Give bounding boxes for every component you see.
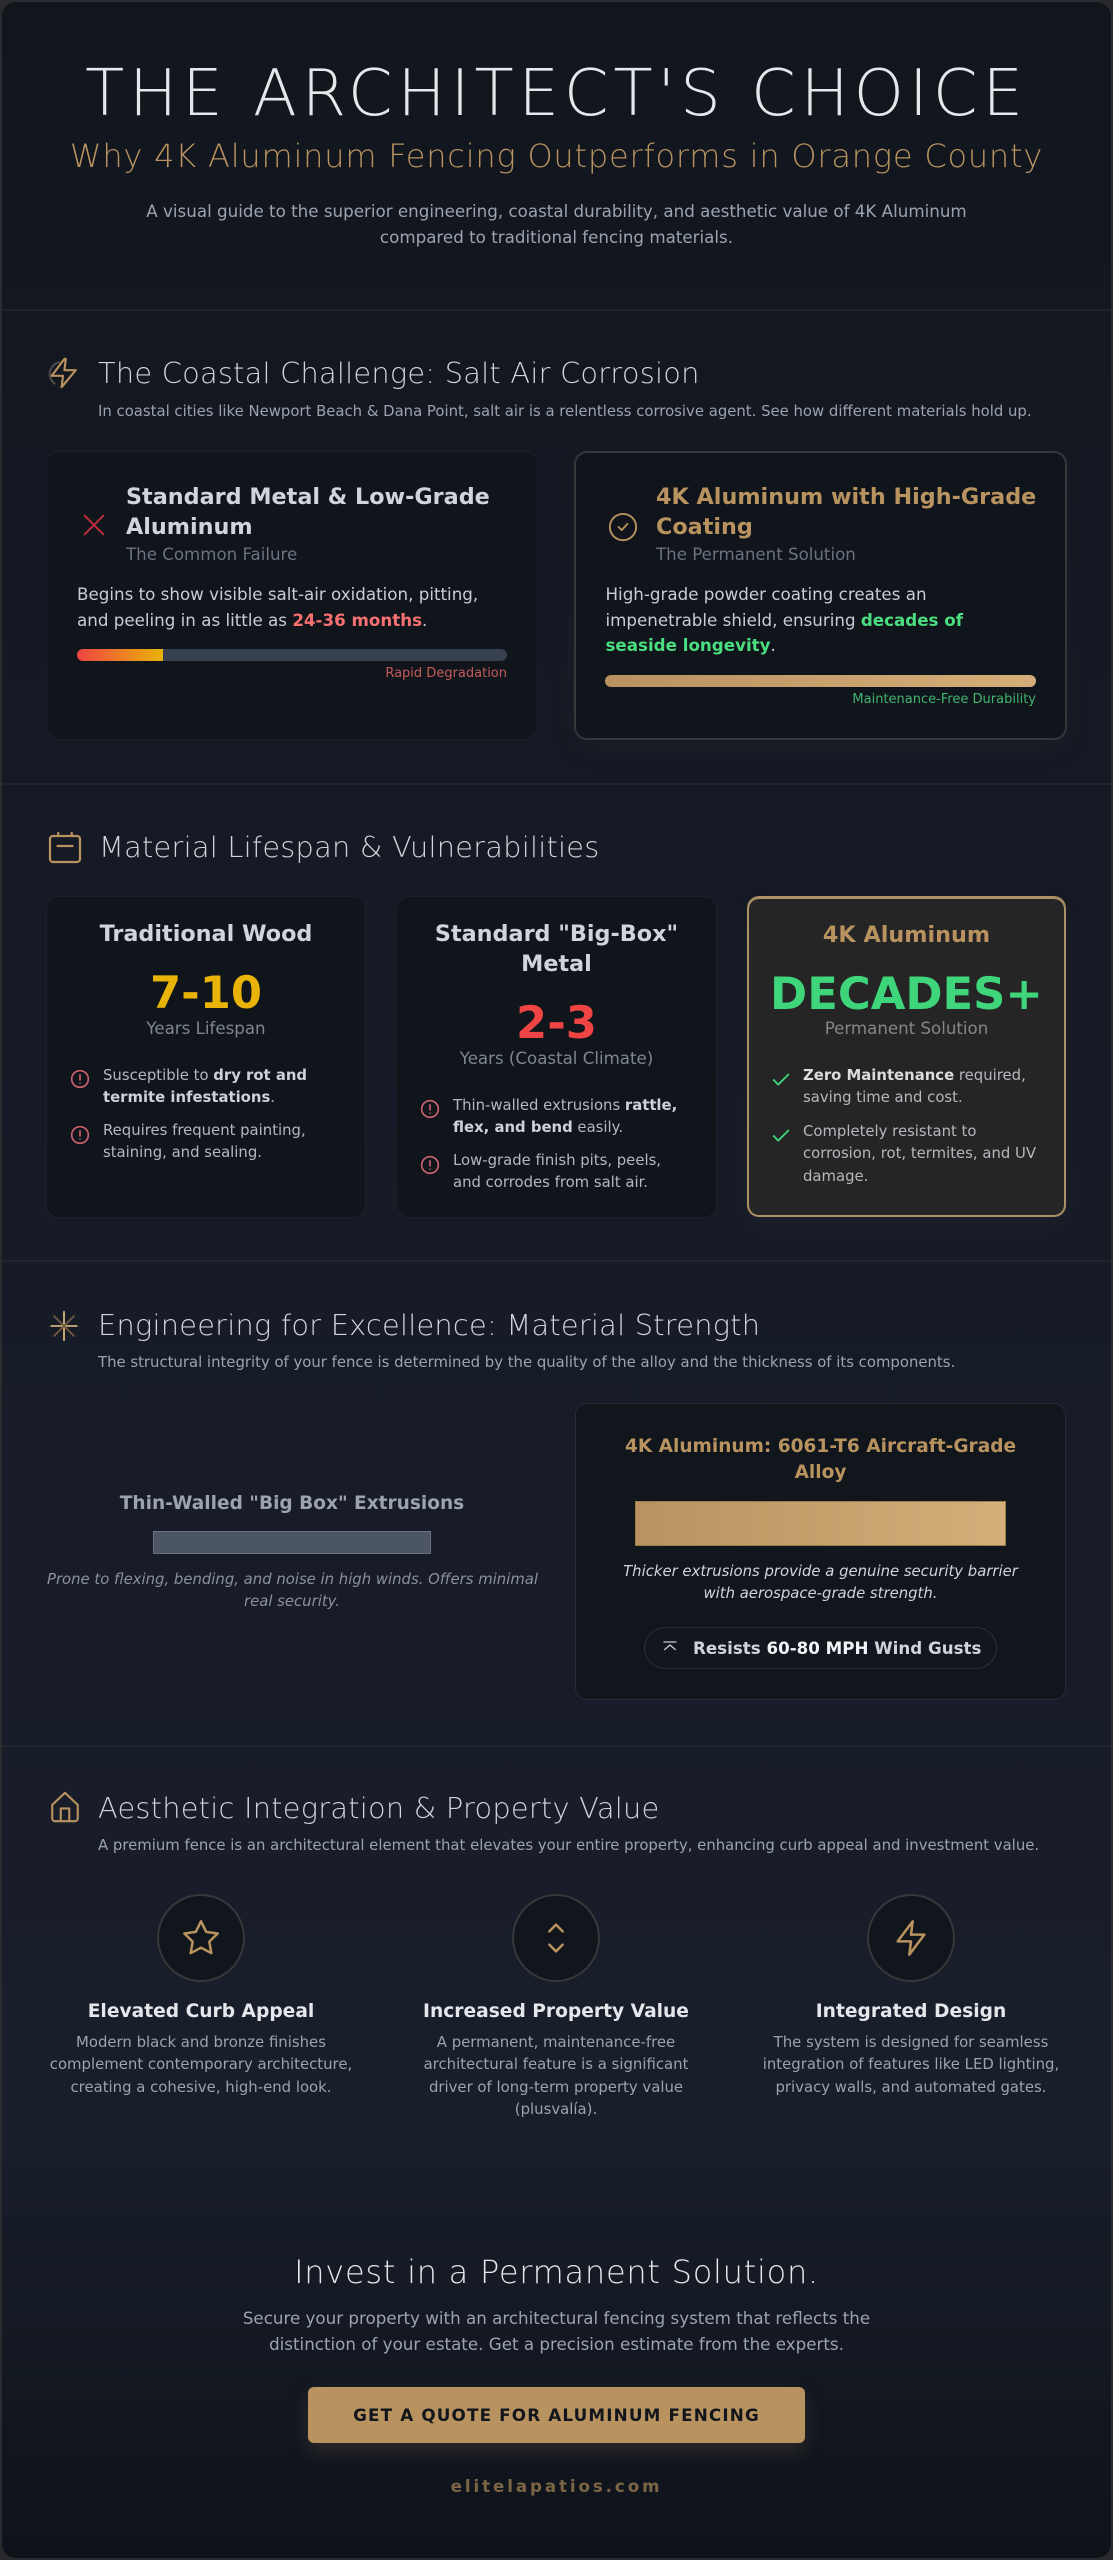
- description: compared to traditional fencing materials.: [380, 227, 733, 247]
- lifespan value: DECADES+: [770, 967, 1043, 1020]
- list item: [803, 1122, 1036, 1185]
- body text: [606, 584, 964, 655]
- list item: flex, and bend easily.: [453, 1118, 623, 1136]
- section heading: The Coastal Challenge: Salt Air Corrosion: [98, 356, 700, 390]
- list: benefits: [772, 1066, 1036, 1185]
- section intro: The structural integrity of your fence is determined by the quality of the alloy and the thickness of its components.: [98, 1353, 955, 1371]
- card title: Aluminum: [126, 514, 253, 540]
- body text: and peeling in as little as 24-36 months.: [77, 610, 427, 630]
- feature text: [756, 2031, 1066, 2098]
- list item: [103, 1066, 307, 1106]
- card title: 4K Aluminum with High-Grade: [656, 484, 1036, 510]
- panel: thin-walled: [47, 1493, 538, 1610]
- footer website: elitelapatios.com: [451, 2476, 662, 2496]
- lifespan label: Years (Coastal Climate): [460, 1049, 653, 1068]
- body text: High-grade powder coating creates an: [606, 584, 927, 604]
- feature text: [50, 2033, 352, 2096]
- list item: and corrodes from salt air.: [453, 1173, 648, 1191]
- body text: [77, 584, 478, 630]
- caption: [47, 1570, 538, 1610]
- feature text: creating a cohesive, high-end look.: [70, 2078, 332, 2096]
- card title: [435, 921, 678, 977]
- list item: Completely resistant to: [803, 1122, 976, 1140]
- subtitle: Why 4K Aluminum Fencing Outperforms in Orange County: [70, 137, 1043, 175]
- feature text: The system is designed for seamless: [774, 2033, 1048, 2051]
- title: THE ARCHITECT'S CHOICE: [85, 57, 1028, 131]
- card title: Standard "Big-Box": [435, 921, 678, 947]
- icon: star: [157, 1894, 245, 1982]
- card title: Metal: [521, 951, 592, 977]
- section: material lifespan: [47, 830, 1066, 1217]
- icon: lightning bolt: [48, 358, 77, 388]
- section heading: Aesthetic Integration & Property Value: [98, 1791, 659, 1825]
- body text: Begins to show visible salt-air oxidation, pitting,: [77, 584, 478, 604]
- section: aesthetic integration: [50, 1791, 1059, 2118]
- progress bar: [77, 649, 507, 661]
- feature text: driver of long-term property value: [429, 2078, 683, 2096]
- panel title: Thin-Walled "Big Box" Extrusions: [120, 1493, 464, 1514]
- caption: Prone to flexing, bending, and noise in high winds. Offers minimal: [47, 1570, 538, 1588]
- caption: with aerospace-grade strength.: [704, 1584, 938, 1602]
- list item: saving time and cost.: [803, 1088, 963, 1106]
- feature text: [401, 2031, 711, 2121]
- lifespan label: Permanent Solution: [825, 1019, 988, 1038]
- list item: [452, 1096, 677, 1136]
- panel: 4k aluminum: [575, 452, 1066, 739]
- icon: x mark: [84, 514, 104, 536]
- badge text: Resists 60-80 MPH Wind Gusts: [693, 1638, 981, 1658]
- progress bar: [605, 675, 1036, 687]
- card title: Traditional Wood: [100, 921, 312, 947]
- list item: Thin-walled extrusions rattle,: [453, 1096, 677, 1114]
- panel title: 4K Aluminum: 6061-T6 Aircraft-Grade: [625, 1436, 1016, 1457]
- feature: curb appeal: [50, 1894, 352, 2096]
- feature text: architectural feature is a significant: [424, 2055, 688, 2073]
- cta text: Secure your property with an architectural fencing system that reflects the: [243, 2308, 870, 2328]
- description: A visual guide to the superior engineering, coastal durability, and aesthetic value of 4K Aluminum: [146, 201, 967, 221]
- button: [308, 2387, 805, 2443]
- list item: damage.: [803, 1167, 868, 1185]
- bar: thick extrusion: [635, 1501, 1006, 1546]
- feature text: complement contemporary architecture,: [50, 2055, 352, 2073]
- list item: termite infestations.: [103, 1088, 275, 1106]
- icon: alert: [70, 1126, 90, 1144]
- lifespan label: Years Lifespan: [146, 1019, 266, 1038]
- card title: [126, 484, 490, 540]
- list item: staining, and sealing.: [103, 1143, 262, 1161]
- body text: impenetrable shield, ensuring decades of: [606, 610, 963, 630]
- icon: alert: [420, 1100, 440, 1118]
- list item: [103, 1121, 306, 1161]
- lifespan value: 7-10: [150, 966, 262, 1019]
- icon: up-down chevrons: [512, 1894, 600, 1982]
- icon: alert: [420, 1156, 440, 1174]
- caption: real security.: [244, 1592, 340, 1610]
- list item: Requires frequent painting,: [103, 1121, 306, 1139]
- section: the coastal challenge: [46, 356, 1067, 740]
- card title: Coating: [656, 514, 753, 540]
- cta text: [0, 2305, 1113, 2357]
- card title: 4K Aluminum: [823, 922, 990, 948]
- feature: property value: [401, 1894, 711, 2154]
- panel: standard metal: [47, 452, 537, 739]
- bar: thin extrusion: [153, 1531, 431, 1554]
- feature text: integration of features like LED lighting,: [763, 2055, 1059, 2073]
- feature text: privacy walls, and automated gates.: [775, 2078, 1047, 2096]
- panel title: [625, 1436, 1016, 1483]
- lifespan value: 2-3: [516, 996, 597, 1049]
- list item: Low-grade finish pits, peels,: [453, 1151, 661, 1169]
- card title: [656, 484, 1036, 540]
- icon: check: [772, 1074, 790, 1086]
- body text: seaside longevity.: [606, 635, 776, 655]
- card title: Standard Metal & Low-Grade: [126, 484, 490, 510]
- cta heading: Invest in a Permanent Solution.: [294, 2253, 819, 2291]
- panel: traditional wood: [47, 897, 365, 1217]
- section: engineering: [47, 1308, 1066, 1700]
- list: vulnerabilities: [70, 1066, 307, 1161]
- icon: alert: [70, 1070, 90, 1088]
- card subtitle: The Permanent Solution: [656, 545, 856, 564]
- list: vulnerabilities: [420, 1096, 677, 1191]
- feature text: A permanent, maintenance-free: [437, 2033, 675, 2051]
- feature title: Integrated Design: [816, 2001, 1006, 2022]
- caption: [623, 1562, 1019, 1602]
- icon: check circle: [608, 513, 638, 542]
- caption: Thicker extrusions provide a genuine security barrier: [623, 1562, 1018, 1580]
- icon: check: [772, 1130, 790, 1142]
- feature title: Elevated Curb Appeal: [88, 2001, 314, 2022]
- panel: 6061-T6: [575, 1403, 1066, 1700]
- header: [70, 57, 1043, 247]
- card subtitle: The Common Failure: [126, 545, 297, 564]
- feature text: Modern black and bronze finishes: [76, 2033, 326, 2051]
- feature: integrated design: [756, 1894, 1066, 2154]
- feature title: Increased Property Value: [423, 2001, 689, 2022]
- section heading: Engineering for Excellence: Material Strength: [98, 1308, 760, 1342]
- section heading: Material Lifespan & Vulnerabilities: [99, 830, 599, 864]
- icon: wind: [663, 1641, 677, 1650]
- icon: lightning bolt: [867, 1894, 955, 1982]
- list item: Zero Maintenance required,: [803, 1066, 1026, 1084]
- list item: corrosion, rot, termites, and UV: [803, 1144, 1036, 1162]
- icon: calendar: [48, 832, 82, 864]
- section intro: A premium fence is an architectural element that elevates your entire property, enhancing curb appeal and investment value.: [98, 1836, 1039, 1854]
- section intro: In coastal cities like Newport Beach & Dana Point, salt air is a relentless corrosive agent. See how different materials hold up.: [98, 402, 1032, 420]
- panel title: Alloy: [795, 1462, 846, 1483]
- icon: house: [51, 1792, 79, 1822]
- cta text: distinction of your estate. Get a precision estimate from the experts.: [269, 2334, 844, 2354]
- feature text: (plusvalía).: [515, 2100, 597, 2118]
- icon: asterisk: [50, 1310, 78, 1342]
- list item: [453, 1151, 661, 1191]
- button: GET A QUOTE FOR ALUMINUM FENCING: [353, 2405, 760, 2425]
- panel: big-box metal: [397, 897, 716, 1217]
- panel: 4k aluminum: [747, 897, 1066, 1217]
- list item: Susceptible to dry rot and: [103, 1066, 307, 1084]
- bar label: Maintenance-Free Durability: [852, 692, 1036, 707]
- call to action: [0, 2240, 1113, 2520]
- wind badge: [644, 1627, 997, 1669]
- list item: [803, 1066, 1026, 1106]
- description: [146, 201, 967, 247]
- bar label: Rapid Degradation: [385, 666, 507, 681]
